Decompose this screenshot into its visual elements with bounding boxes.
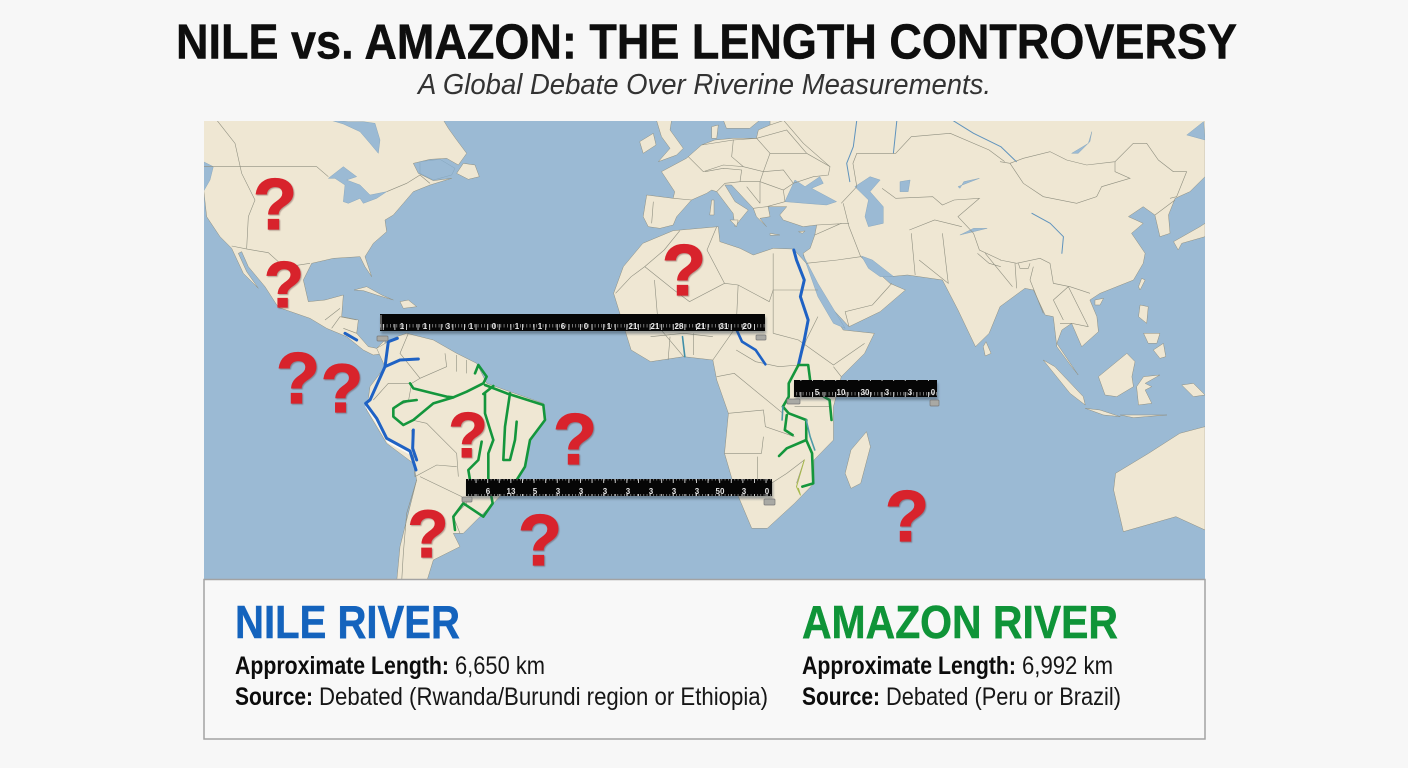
ruler: Atlantic upper: 28 <box>675 322 684 331</box>
ruler: Atlantic upper: 31 <box>720 322 729 331</box>
river: Nile north <box>794 250 808 365</box>
panel: river facts <box>204 580 1205 739</box>
question mark: Indian Ocean: ? <box>885 477 929 557</box>
ruler: Atlantic lower: 3 <box>556 487 561 496</box>
land: Denmark <box>712 125 718 138</box>
ruler: Atlantic upper: 1 <box>538 322 543 331</box>
land: Japan <box>1174 223 1205 250</box>
ruler: Atlantic lower: 3 <box>649 487 654 496</box>
Sea of Okhotsk <box>1187 122 1205 140</box>
land: Visayas <box>1144 333 1160 343</box>
ruler: Atlantic upper: 0 <box>492 322 497 331</box>
Amazon source: Source: <box>802 683 880 711</box>
thin Asian rivers <box>682 120 1063 357</box>
Amazon length: 6,992 km <box>1022 652 1113 680</box>
Red Sea <box>803 255 845 328</box>
ocean <box>204 121 1205 579</box>
ruler: Atlantic lower: 3 <box>626 487 631 496</box>
land: Newfoundland <box>457 163 479 179</box>
ruler: Atlantic upper: 3 <box>446 322 451 331</box>
land: Borneo <box>1098 353 1135 397</box>
ruler: Atlantic upper: 21 <box>629 322 638 331</box>
Black Sea <box>785 177 837 205</box>
borders <box>616 120 1012 485</box>
land: Africa <box>614 227 874 528</box>
Aral Sea <box>900 180 910 192</box>
ruler: East Africa: 3 <box>908 388 913 397</box>
land: Cyprus <box>798 231 805 233</box>
ruler: Atlantic lower: 0 <box>765 487 770 496</box>
ruler: Atlantic lower <box>462 479 775 505</box>
ruler: Atlantic lower: 3 <box>695 487 700 496</box>
ruler: Atlantic upper: 1 <box>607 322 612 331</box>
river: blue overlay on South America <box>345 333 418 470</box>
river: blue western tributary <box>737 331 765 364</box>
subtitle: A Global Debate Over Riverine Measurements. <box>416 69 991 101</box>
Amazon length: Approximate Length: <box>802 652 1016 680</box>
river: teal side branches <box>782 407 815 450</box>
Amazon source: Debated (Peru or Brazil) <box>886 683 1121 711</box>
ruler: Atlantic upper: 0 <box>584 322 589 331</box>
panel: world map <box>200 120 1205 582</box>
borders: South America <box>373 333 467 582</box>
land: Scandinavia <box>723 120 760 128</box>
question mark: Atlantic east of Brazil: ? <box>553 400 597 480</box>
ruler: East Africa: 3 <box>885 388 890 397</box>
question mark: Argentina: ? <box>408 497 448 572</box>
ruler: Atlantic lower: 6 <box>486 487 491 496</box>
ruler: East Africa: 10 <box>837 388 846 397</box>
land: Crete <box>770 233 780 235</box>
land: New Guinea <box>1182 383 1205 397</box>
ruler: Atlantic upper: 6 <box>561 322 566 331</box>
river: pale southern tributary <box>797 460 804 495</box>
Caspian Sea <box>855 177 883 227</box>
borders <box>203 120 430 333</box>
ruler: East Africa: 5 <box>815 388 820 397</box>
ruler: Atlantic upper: 1 <box>423 322 428 331</box>
river: green East African branches <box>779 365 832 487</box>
Persian Gulf <box>861 256 894 277</box>
map: Americas <box>200 120 546 582</box>
Amazon source <box>802 683 1121 711</box>
land: North and Central America <box>200 120 479 355</box>
land: Sri Lanka <box>983 342 991 356</box>
lakes and bays <box>203 120 455 203</box>
ruler: Atlantic upper: 1 <box>400 322 405 331</box>
land: South America <box>367 333 546 582</box>
land: Eurasia <box>643 120 1205 375</box>
ruler: Atlantic lower: 50 <box>716 487 725 496</box>
borders: Europe <box>652 120 830 223</box>
ruler: Atlantic lower: 3 <box>672 487 677 496</box>
land: Sumatra <box>1043 360 1085 405</box>
question mark: USA: ? <box>253 165 297 245</box>
land: Luzon <box>1139 305 1148 323</box>
ruler: East Africa <box>787 380 939 406</box>
Nile source: Debated (Rwanda/Burundi region or Ethiopia) <box>319 683 768 711</box>
title: NILE vs. AMAZON: THE LENGTH CONTROVERSY <box>176 14 1237 70</box>
Nile source: Source: <box>235 683 313 711</box>
map: Eurasia, Africa, Australia <box>614 120 1205 532</box>
land: Java <box>1085 408 1120 417</box>
question mark: Mexico: ? <box>264 248 304 321</box>
land: Sulawesi <box>1137 375 1160 405</box>
ruler: Atlantic upper: 21 <box>697 322 706 331</box>
river: white halo, South America <box>365 379 410 454</box>
ruler: Atlantic upper <box>377 314 766 341</box>
river: green Amazon branches <box>393 365 545 530</box>
inland and marginal seas <box>785 122 1205 328</box>
land: Cuba <box>354 287 393 300</box>
ruler: Atlantic upper: 21 <box>651 322 660 331</box>
land: Lesser Sunda <box>1120 415 1167 418</box>
land: islands <box>640 120 1205 532</box>
ruler: Atlantic upper: 1 <box>469 322 474 331</box>
ruler: Atlantic lower: 3 <box>579 487 584 496</box>
question mark: Brazil: ? <box>448 399 488 471</box>
Nile length: Approximate Length: <box>235 652 449 680</box>
question mark: Pacific left: ? <box>276 339 320 419</box>
Lake Baikal <box>1072 132 1092 153</box>
heading: Amazon River: AMAZON RIVER <box>802 596 1118 648</box>
Nile length: 6,650 km <box>455 652 545 680</box>
ruler: Atlantic lower: 3 <box>742 487 747 496</box>
land: Mindanao <box>1153 343 1166 358</box>
ruler: Atlantic upper: 20 <box>743 322 752 331</box>
land: Taiwan <box>1139 278 1145 290</box>
land: Hainan <box>1095 298 1104 305</box>
question marks <box>253 165 929 581</box>
question mark: South Atlantic: ? <box>518 501 562 581</box>
ruler: Atlantic lower: 5 <box>533 487 538 496</box>
land: Sicily <box>730 220 738 227</box>
borders: East Asia <box>1000 143 1187 327</box>
question mark: Algeria: ? <box>662 231 706 311</box>
ruler: Atlantic lower: 3 <box>603 487 608 496</box>
question mark: Pacific right: ? <box>321 350 363 427</box>
land: Corsica and Sardinia <box>710 200 714 215</box>
ruler: East Africa: 30 <box>861 388 870 397</box>
land: Ireland <box>640 133 656 153</box>
Indus lake <box>960 228 987 235</box>
Lake Balkhash <box>958 178 979 188</box>
land: Madagascar <box>845 432 870 488</box>
land: Australia <box>1114 427 1205 532</box>
land: Britain <box>656 120 683 162</box>
ruler: Atlantic lower: 13 <box>507 487 516 496</box>
land: Hispaniola <box>400 300 417 308</box>
heading: Nile River: NILE RIVER <box>235 596 460 648</box>
ruler: Atlantic upper: 1 <box>515 322 520 331</box>
ruler: East Africa: 0 <box>931 388 936 397</box>
